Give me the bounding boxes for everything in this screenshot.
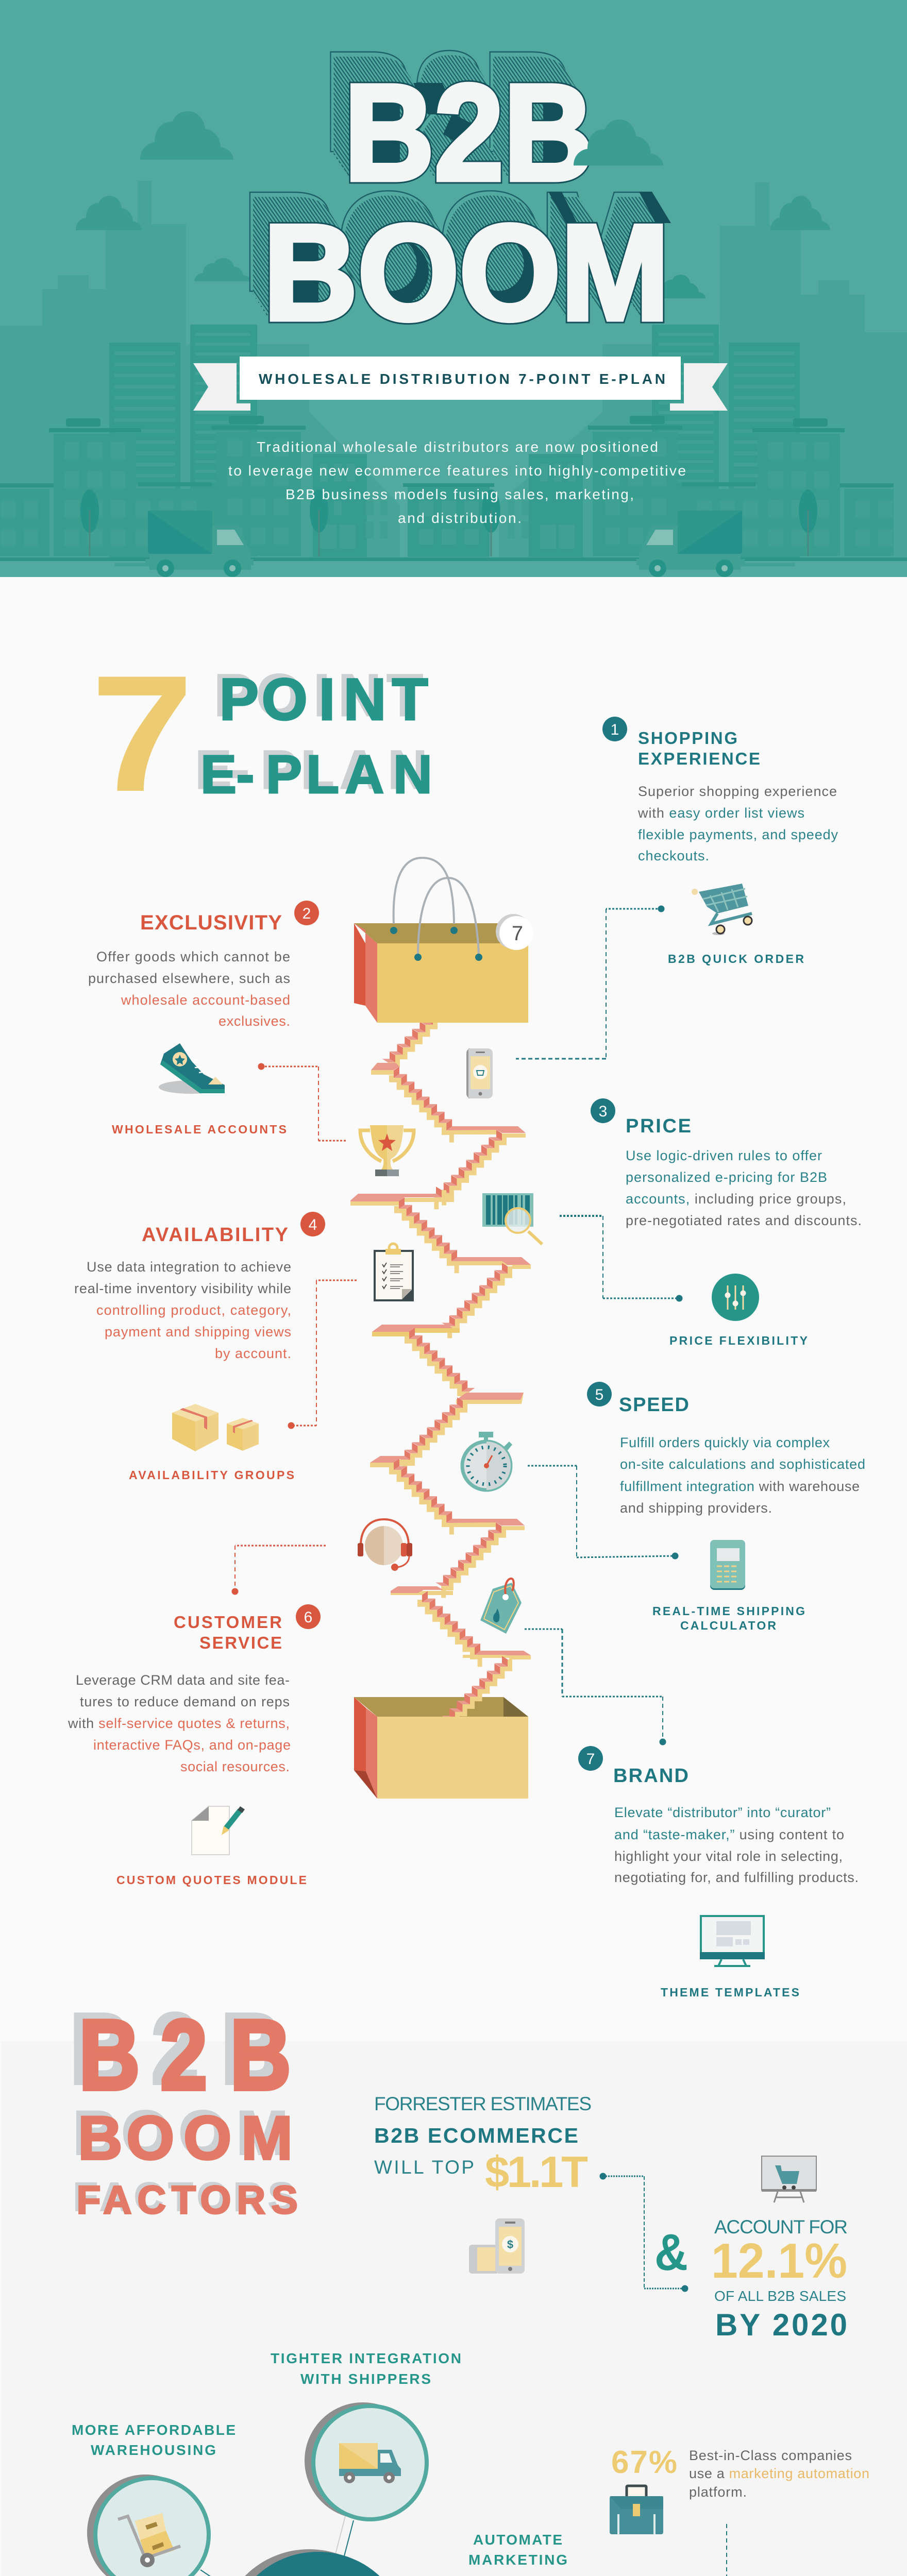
stairs flight 4 bbox=[372, 1263, 512, 1338]
body text bbox=[74, 1259, 291, 1361]
stairs flight 8 bbox=[391, 1522, 506, 1598]
word boom: BOOM bbox=[78, 2104, 293, 2173]
item 4: availability bbox=[74, 1212, 414, 1482]
icon: headset bbox=[358, 1519, 412, 1571]
body text: by account. bbox=[215, 1346, 291, 1361]
icon: shopping cart bbox=[692, 884, 752, 935]
label: tighter integration: TIGHTER INTEGRATION bbox=[271, 2350, 461, 2366]
label: CUSTOM QUOTES MODULE bbox=[116, 1873, 307, 1887]
truck right bbox=[636, 511, 745, 577]
badge 3: 3 bbox=[599, 1103, 607, 1120]
title: B2B: B2B bbox=[344, 56, 594, 209]
cloud: upper left bbox=[140, 111, 233, 160]
label: CALCULATOR bbox=[680, 1619, 776, 1632]
body text: Leverage CRM data and site fea- bbox=[76, 1672, 290, 1688]
body text: highlight your vital role in selecting, bbox=[614, 1849, 843, 1864]
stat: ampersand: & bbox=[654, 2224, 688, 2281]
heading: SHOPPING bbox=[638, 728, 737, 748]
heading: CUSTOMER bbox=[174, 1613, 282, 1632]
intro paragraph: to leverage new ecommerce features into highly-competitive bbox=[228, 463, 686, 479]
label: tighter integration bbox=[271, 2350, 461, 2387]
title: B2B: B2B bbox=[330, 33, 579, 187]
label bbox=[652, 1604, 805, 1632]
title: B2B: B2B bbox=[332, 38, 582, 191]
connector bbox=[232, 1546, 326, 1595]
body text bbox=[637, 784, 838, 863]
badge 4 bbox=[300, 1212, 325, 1236]
label: tighter integration: WITH SHIPPERS bbox=[300, 2371, 431, 2387]
stat: 12.1 percent: 12.1% bbox=[711, 2233, 847, 2289]
item 2: exclusivity bbox=[88, 901, 347, 1141]
title: BOOM: BOOM bbox=[259, 190, 665, 342]
word factors: FACTORS bbox=[73, 2175, 295, 2219]
title: BOOM: BOOM bbox=[254, 182, 660, 334]
heading: EXCLUSIVITY bbox=[140, 911, 282, 934]
title: BOOM: BOOM bbox=[246, 170, 652, 321]
icon: clipboard bbox=[374, 1244, 414, 1301]
ribbon text: WHOLESALE DISTRIBUTION 7-POINT E-PLAN bbox=[259, 371, 665, 387]
ground line bbox=[0, 557, 907, 561]
body text: on-site calculations and sophisticated bbox=[620, 1456, 865, 1472]
connector bbox=[516, 906, 664, 1059]
truck left bbox=[145, 511, 254, 577]
icon: monitor bbox=[700, 1915, 765, 1967]
stairs flight 10 bbox=[442, 1656, 512, 1731]
hub: b2b boom bbox=[220, 2549, 408, 2576]
body text: pre-negotiated rates and discounts. bbox=[626, 1213, 862, 1228]
body text: checkouts. bbox=[638, 848, 709, 863]
body text: and shipping providers. bbox=[620, 1500, 772, 1516]
body text: interactive FAQs, and on-page bbox=[93, 1737, 291, 1753]
badge 7 bbox=[578, 1746, 603, 1771]
item 1: shopping experience bbox=[516, 717, 838, 1059]
big number 7: 7 bbox=[91, 641, 194, 826]
body text: Fulfill orders quickly via complex bbox=[620, 1435, 830, 1450]
stairs flight 7 bbox=[389, 1459, 525, 1534]
word boom: BOOM bbox=[73, 2098, 288, 2167]
far skyline left bbox=[0, 181, 400, 557]
icon: calculator bbox=[710, 1540, 745, 1590]
body text: tures to reduce demand on reps bbox=[80, 1694, 290, 1709]
stat: 67 percent: Best-in-Class companies bbox=[689, 2448, 852, 2463]
icon: phone with basket bbox=[466, 1048, 493, 1098]
panel: hero bbox=[0, 0, 907, 577]
heading word: point: POINT bbox=[220, 667, 428, 733]
badge 2: 2 bbox=[303, 905, 311, 922]
factor: automate marketing labels: AUTOMATE bbox=[473, 2532, 562, 2548]
item 6: customer service bbox=[68, 1519, 522, 1887]
label: PRICE FLEXIBILITY bbox=[669, 1334, 808, 1347]
icon: presentation board with cart bbox=[762, 2156, 816, 2202]
stairs flight 3 bbox=[394, 1197, 531, 1273]
label: more affordable warehousing bbox=[72, 2422, 236, 2458]
stairs flight 1 bbox=[389, 1066, 526, 1143]
icon: document and pencil bbox=[192, 1806, 245, 1855]
top bag back bbox=[354, 858, 528, 943]
cloud: behind title left bbox=[194, 258, 251, 281]
body text bbox=[68, 1672, 291, 1774]
body text: controlling product, category, bbox=[96, 1302, 291, 1318]
factor: automate marketing labels: MARKETING bbox=[468, 2552, 567, 2568]
label: THEME TEMPLATES bbox=[661, 1986, 799, 1999]
panel: boom factors bbox=[2, 1993, 907, 2576]
body text: real-time inventory visibility while bbox=[74, 1281, 291, 1296]
intro paragraph: B2B business models fusing sales, marketing, bbox=[285, 486, 634, 502]
title: BOOM: BOOM bbox=[244, 165, 650, 317]
title: B2B: B2B bbox=[338, 46, 587, 199]
body text: accounts, including price groups, bbox=[626, 1191, 846, 1207]
label: REAL-TIME SHIPPING bbox=[652, 1604, 805, 1618]
icon: price tag bbox=[480, 1579, 522, 1634]
body text bbox=[614, 1805, 859, 1885]
top bag front bbox=[354, 878, 533, 1023]
intro paragraph: Traditional wholesale distributors are now positioned bbox=[257, 439, 658, 455]
stat: 67 percent: platform. bbox=[689, 2484, 747, 2500]
heading: EXPERIENCE bbox=[638, 749, 760, 768]
heading: PRICE bbox=[626, 1115, 691, 1137]
title: BOOM: BOOM bbox=[249, 174, 655, 326]
body text: fulfillment integration with warehouse bbox=[620, 1479, 860, 1494]
badge 1 bbox=[602, 717, 627, 741]
cloud: mid left bbox=[76, 196, 142, 230]
stat: forrester estimate bbox=[374, 2093, 592, 2197]
item 7: brand bbox=[525, 1629, 859, 1999]
bottom box front bbox=[354, 1697, 528, 1799]
title: BOOM: BOOM bbox=[263, 196, 669, 348]
body text: and “taste-maker,” using content to bbox=[614, 1827, 844, 1842]
cloud: over title bbox=[574, 120, 663, 165]
centre low buildings bbox=[313, 454, 583, 557]
heading bbox=[638, 728, 760, 768]
bottom box inner shade bbox=[503, 1697, 528, 1717]
label: AVAILABILITY GROUPS bbox=[129, 1468, 294, 1482]
connector bbox=[602, 2524, 727, 2576]
towers left bbox=[109, 325, 257, 568]
title: B2B: B2B bbox=[340, 50, 590, 203]
bottom box interior bbox=[354, 1697, 528, 1717]
body text: flexible payments, and speedy bbox=[638, 827, 838, 842]
connector bbox=[525, 1629, 666, 1745]
word b2b: B2B bbox=[79, 1999, 291, 2110]
ribbon banner bbox=[193, 357, 728, 411]
stairs flight 9 bbox=[417, 1591, 531, 1667]
heading bbox=[174, 1613, 282, 1652]
label: WHOLESALE ACCOUNTS bbox=[112, 1123, 287, 1136]
icon: truck bbox=[339, 2443, 401, 2483]
body text: with easy order list views bbox=[637, 805, 804, 821]
title: B2B: B2B bbox=[344, 56, 594, 209]
icon: phones with dollar bbox=[469, 2218, 525, 2274]
body text: with self-service quotes & returns, bbox=[68, 1716, 290, 1731]
stairs flight 6 bbox=[370, 1397, 467, 1472]
connector bbox=[288, 1280, 357, 1429]
body text: payment and shipping views bbox=[105, 1324, 291, 1340]
body text bbox=[626, 1148, 862, 1228]
intro paragraph: and distribution. bbox=[398, 510, 522, 526]
word b2b: B2B bbox=[70, 1993, 282, 2104]
stairs flight 0 bbox=[371, 1014, 438, 1075]
icon: phones with dollar: $ bbox=[507, 2238, 513, 2251]
title: BOOM: BOOM bbox=[251, 178, 658, 330]
body text: Use logic-driven rules to offer bbox=[626, 1148, 822, 1163]
label: more affordable warehousing: MORE AFFORDABLE bbox=[72, 2422, 236, 2438]
body text: personalized e-pricing for B2B bbox=[626, 1170, 827, 1185]
buildings left bbox=[0, 416, 306, 556]
hub connector lines bbox=[195, 2516, 459, 2576]
body text: social resources. bbox=[180, 1759, 290, 1774]
heading: AVAILABILITY bbox=[142, 1224, 288, 1246]
icon: sneaker bbox=[159, 1043, 225, 1094]
bag number badge: 7 bbox=[512, 922, 523, 945]
badge 5: 5 bbox=[595, 1386, 603, 1403]
stat: 12.1 percent: BY 2020 bbox=[715, 2308, 847, 2342]
label: more affordable warehousing: WAREHOUSING bbox=[91, 2442, 216, 2458]
staircase and bags bbox=[350, 858, 533, 1799]
body text: Superior shopping experience bbox=[638, 784, 837, 799]
badge 4: 4 bbox=[309, 1216, 317, 1233]
factor: automate marketing labels bbox=[468, 2532, 567, 2568]
stairs flight 2 bbox=[350, 1130, 507, 1209]
buildings right bbox=[588, 416, 894, 556]
icon: boxes bbox=[172, 1404, 259, 1451]
item 3: price bbox=[560, 1098, 862, 1347]
stat: 12.1 percent: OF ALL B2B SALES bbox=[714, 2288, 846, 2304]
connector bbox=[560, 1216, 682, 1301]
connector bbox=[600, 2173, 688, 2292]
title: B2B: B2B bbox=[325, 25, 574, 178]
stairs flight 5 bbox=[405, 1328, 524, 1404]
heading: 7 point e-plan bbox=[91, 641, 432, 826]
title: BOOM: BOOM bbox=[257, 186, 663, 338]
stat: 67 percent bbox=[611, 2445, 869, 2500]
towers right bbox=[652, 325, 800, 568]
title: BOOM: BOOM bbox=[263, 196, 669, 348]
body text bbox=[620, 1435, 865, 1516]
body text: Use data integration to achieve bbox=[87, 1259, 291, 1275]
stat: 12.1 percent: ACCOUNT FOR bbox=[714, 2216, 848, 2238]
cloud: mid right bbox=[770, 196, 830, 230]
body text: purchased elsewhere, such as bbox=[88, 971, 290, 986]
badge 1: 1 bbox=[611, 721, 619, 738]
badge 6 bbox=[296, 1604, 321, 1629]
badge 6: 6 bbox=[304, 1609, 312, 1626]
word factors: FACTORS bbox=[76, 2178, 298, 2223]
badge 3 bbox=[591, 1098, 615, 1123]
factor: tighter integration circle bbox=[305, 2402, 427, 2519]
stat: 67 percent: use a marketing automation bbox=[689, 2466, 869, 2481]
badge 7: 7 bbox=[586, 1751, 595, 1768]
heading word: e-plan: E-PLAN bbox=[200, 744, 432, 805]
stat: forrester estimate: FORRESTER ESTIMATES bbox=[374, 2093, 592, 2114]
intro paragraph bbox=[228, 439, 686, 526]
stat: 12.1 percent bbox=[711, 2216, 848, 2342]
bag number badge bbox=[496, 914, 533, 950]
heading: SPEED bbox=[619, 1394, 689, 1416]
label: B2B QUICK ORDER bbox=[668, 952, 804, 965]
icon: hand truck bbox=[118, 2513, 180, 2567]
icon: barcode with magnifier bbox=[482, 1193, 542, 1244]
icon: stopwatch bbox=[462, 1432, 512, 1490]
title: B2B: B2B bbox=[335, 42, 584, 195]
icon: briefcase bbox=[610, 2486, 663, 2534]
body text: negotiating for, and fulfilling products. bbox=[614, 1870, 859, 1885]
heading: BRAND bbox=[613, 1765, 688, 1787]
body text: Offer goods which cannot be bbox=[96, 949, 290, 964]
factor: warehousing circle bbox=[87, 2475, 209, 2576]
title: B2B: B2B bbox=[327, 29, 577, 182]
far skyline right bbox=[499, 182, 907, 557]
stat: forrester estimate: B2B ECOMMERCE bbox=[374, 2124, 578, 2147]
connector bbox=[258, 1063, 347, 1141]
title: BOOM: BOOM bbox=[244, 165, 650, 317]
icon: price sliders bbox=[712, 1274, 759, 1321]
connector bbox=[528, 1466, 678, 1559]
heading word: e-plan: E-PLAN bbox=[195, 740, 427, 800]
stat: forrester estimate: $1.1T bbox=[485, 2148, 588, 2197]
stat: forrester estimate: WILL TOP bbox=[374, 2157, 474, 2178]
icon: trophy bbox=[360, 1125, 414, 1176]
heading: SERVICE bbox=[199, 1633, 282, 1652]
heading word: point: POINT bbox=[214, 663, 423, 728]
body text bbox=[88, 949, 290, 1029]
item 5: speed bbox=[462, 1382, 865, 1632]
title: B2B: B2B bbox=[325, 25, 574, 178]
body text: Elevate “distributor” into “curator” bbox=[614, 1805, 831, 1820]
body text: exclusives. bbox=[219, 1013, 290, 1029]
badge 2 bbox=[294, 901, 319, 925]
heading: b2b boom factors bbox=[70, 1993, 298, 2223]
cloud: behind title right bbox=[654, 275, 706, 298]
trees bbox=[80, 489, 817, 556]
badge 5 bbox=[587, 1382, 612, 1406]
stat: 67 percent: 67% bbox=[611, 2445, 677, 2480]
body text: wholesale account-based bbox=[121, 992, 290, 1008]
